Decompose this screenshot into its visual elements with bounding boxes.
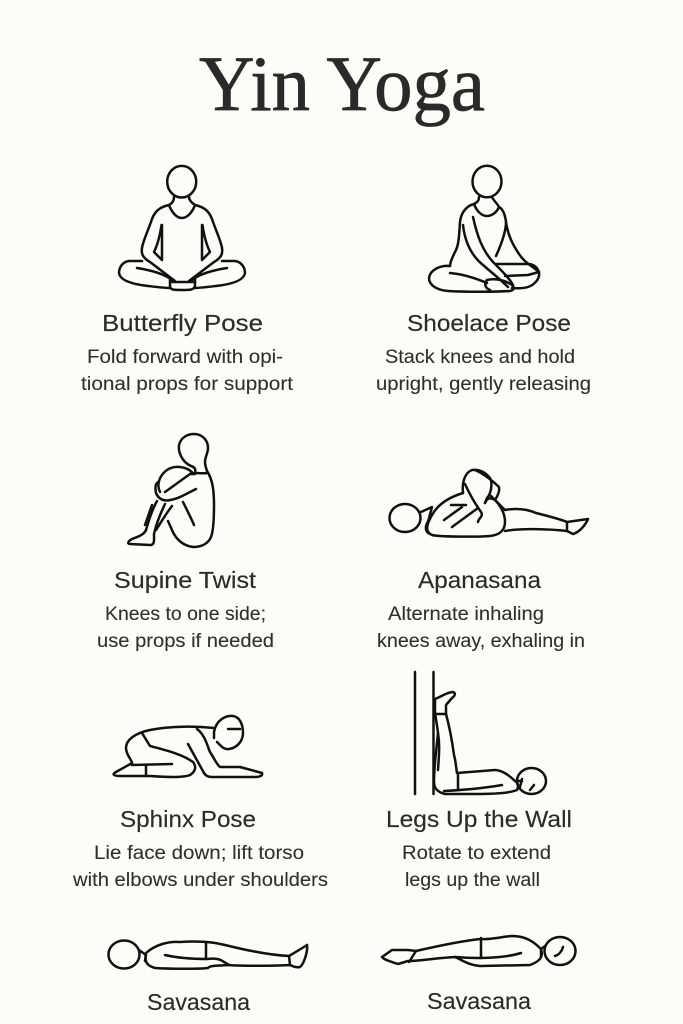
panel: Sphinx Pose — [72, 716, 328, 891]
heading: Shoelace Pose — [407, 310, 571, 336]
panel: Butterfly Pose — [81, 166, 294, 395]
icon: shoelace pose figure — [429, 166, 539, 292]
icon: legs up the wall figure — [415, 672, 546, 794]
panel: Savasana left — [108, 940, 307, 1015]
description: Rotate to extend — [402, 843, 551, 864]
heading: Apanasana — [418, 567, 541, 593]
icon: savasana figure facing right — [382, 936, 576, 966]
panel: Apanasana — [377, 470, 588, 652]
heading: Legs Up the Wall — [386, 806, 572, 832]
panel: Supine Twist — [97, 434, 274, 652]
description: Alternate inhaling — [388, 604, 544, 625]
icon: supine twist figure — [128, 434, 214, 547]
description — [402, 843, 551, 891]
description — [377, 604, 585, 652]
description: legs up the wall — [405, 870, 540, 891]
panel: Shoelace Pose — [376, 166, 591, 395]
heading: Butterfly Pose — [102, 310, 263, 336]
description: upright, gently releasing — [376, 374, 591, 395]
heading: Savasana — [147, 989, 250, 1015]
title: Yin Yoga — [199, 40, 485, 127]
description — [81, 347, 294, 395]
description: with elbows under shoulders — [72, 870, 328, 891]
description: use props if needed — [97, 631, 274, 652]
description: knees away, exhaling in — [377, 631, 585, 652]
icon: apanasana figure — [390, 470, 588, 537]
description: Fold forward with opi- — [87, 347, 283, 368]
description: tional props for support — [81, 374, 294, 395]
description: Stack knees and hold — [385, 347, 575, 368]
description: Knees to one side; — [105, 604, 266, 625]
icon: sphinx pose figure — [114, 716, 262, 777]
panel: Savasana right — [382, 936, 576, 1014]
description: Lie face down; lift torso — [94, 843, 304, 864]
description — [97, 604, 274, 652]
panel: Legs Up the Wall — [386, 672, 572, 891]
heading: Supine Twist — [114, 567, 257, 593]
icon: savasana figure facing left — [108, 940, 307, 969]
heading: Sphinx Pose — [120, 806, 256, 832]
heading: Savasana — [427, 988, 531, 1014]
description — [72, 843, 328, 891]
icon: butterfly pose figure — [119, 166, 245, 290]
description — [376, 347, 591, 395]
